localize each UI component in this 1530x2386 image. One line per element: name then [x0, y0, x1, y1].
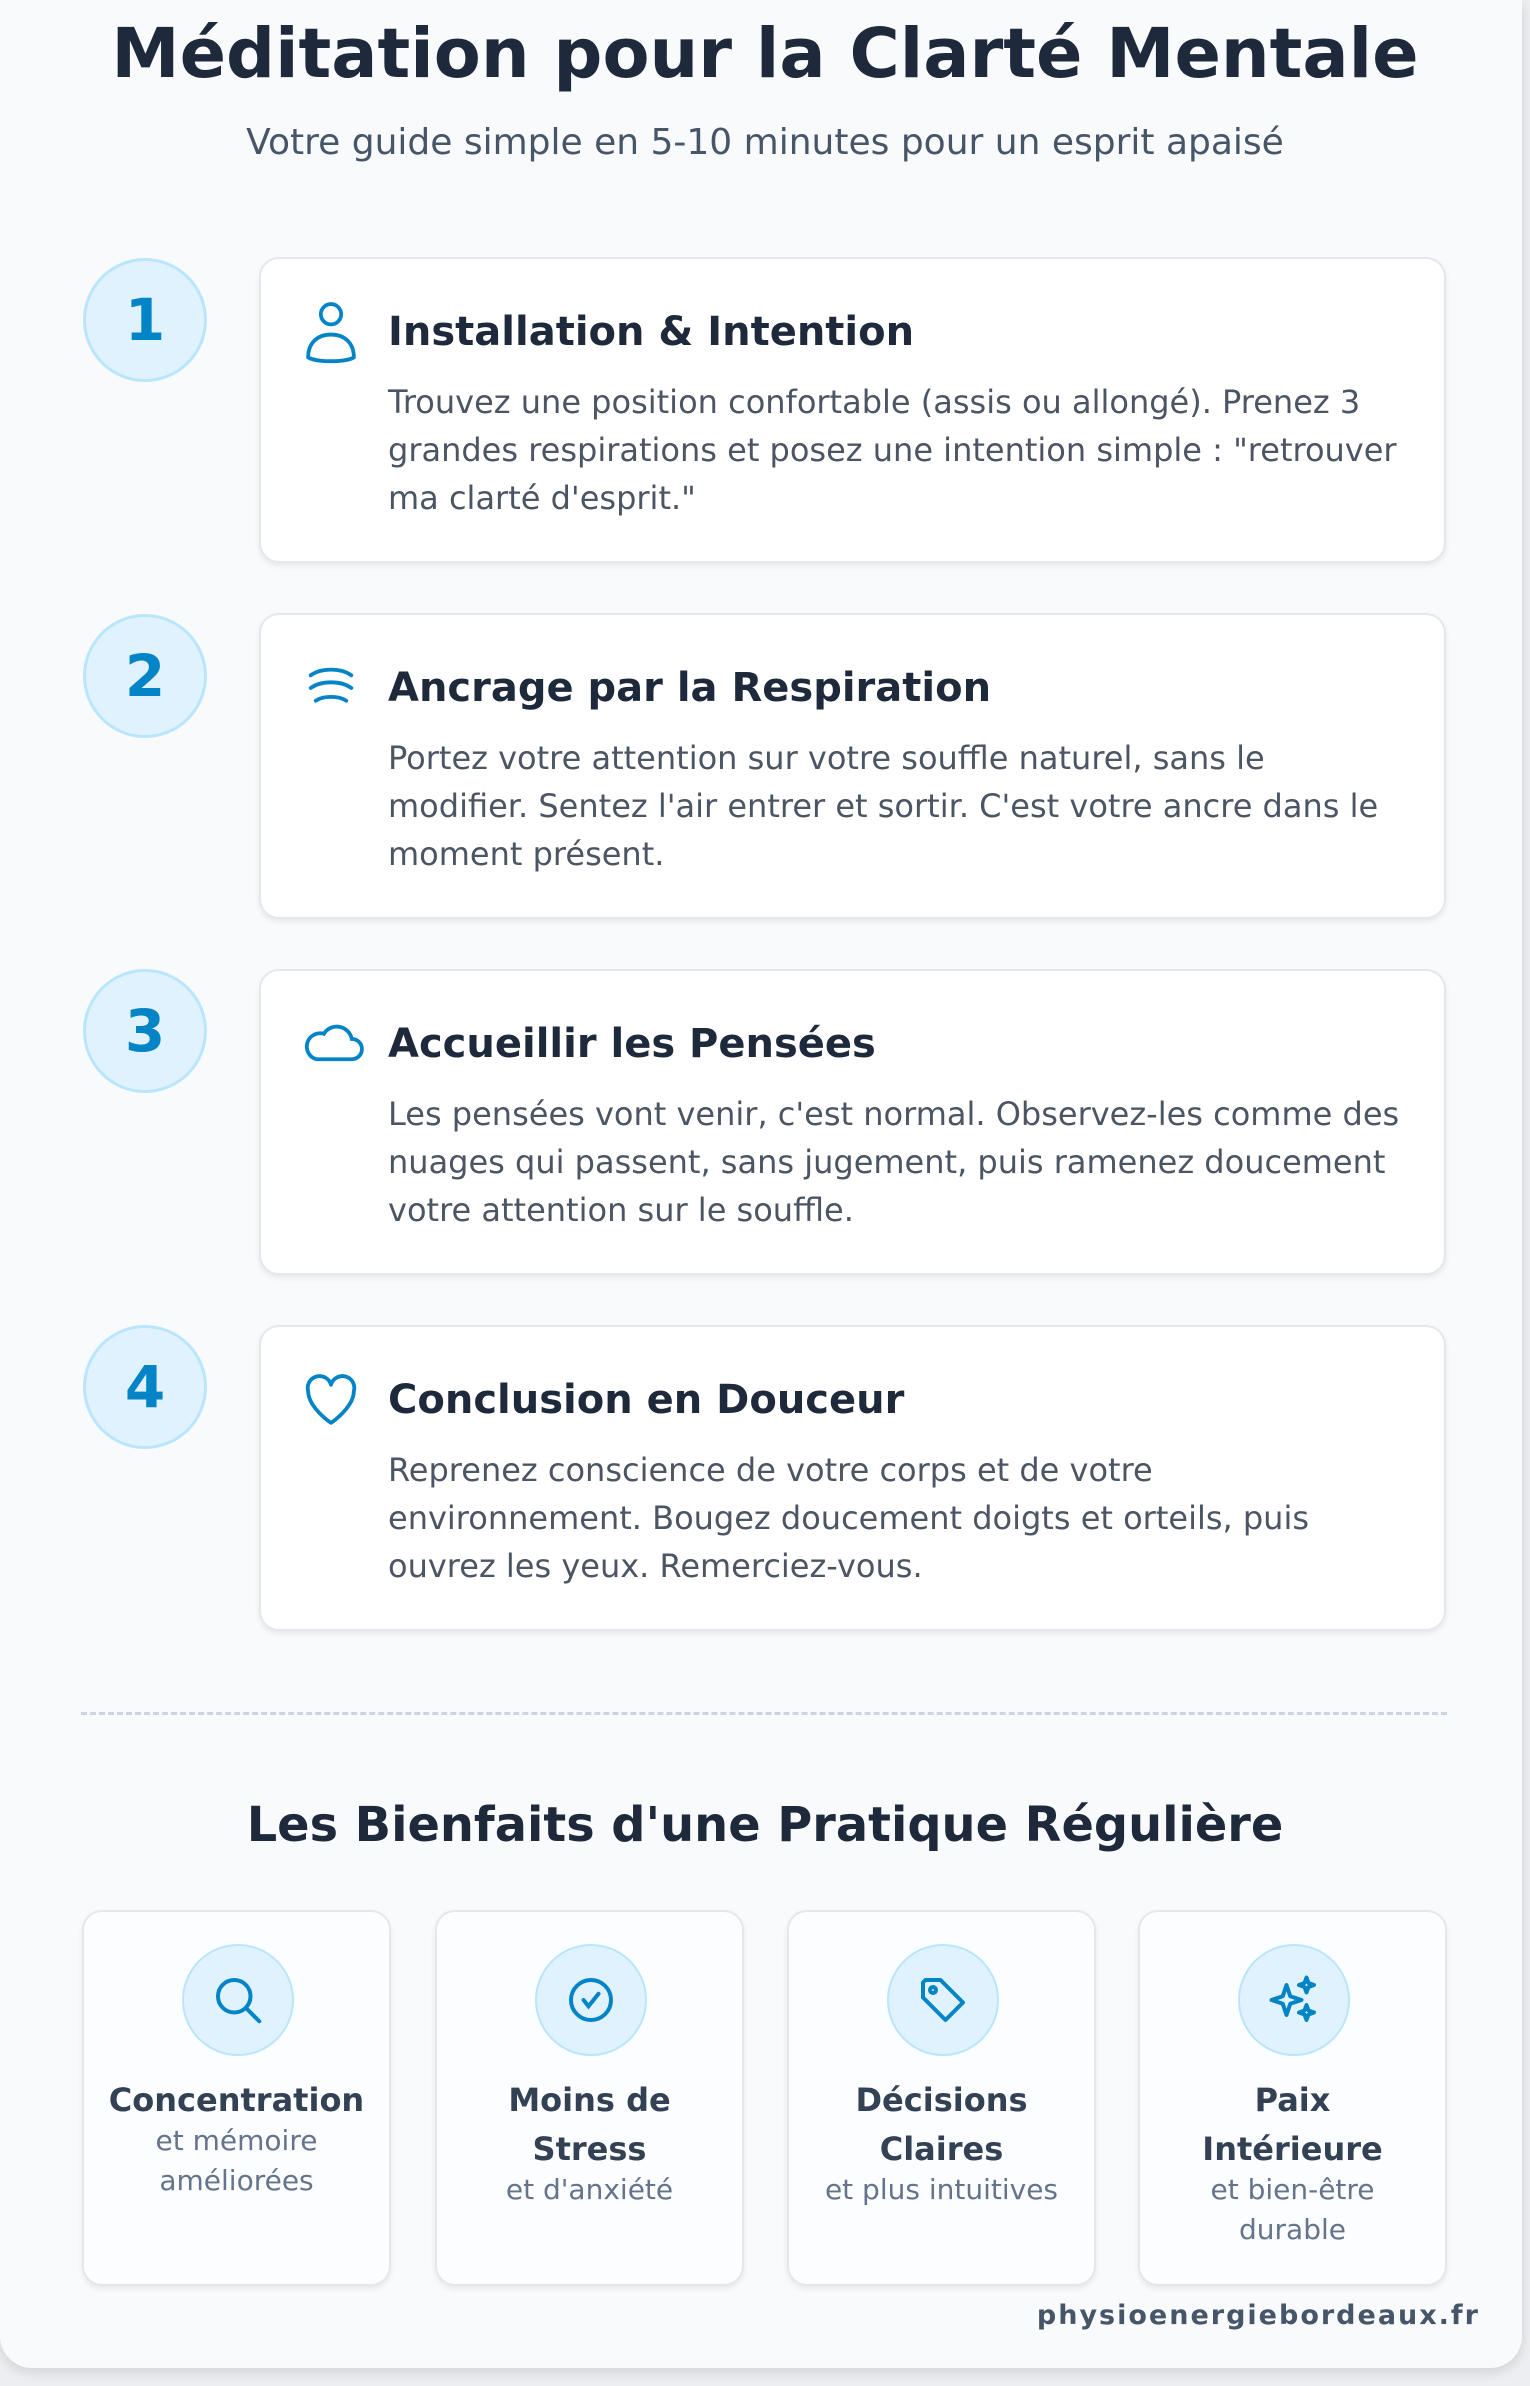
text: Paix: [1255, 2081, 1330, 2119]
text: améliorées: [159, 2164, 314, 2197]
text: Concentration: [109, 2081, 364, 2119]
text: Moins de: [508, 2081, 671, 2119]
text: [109, 2081, 364, 2197]
step number 1: 1: [125, 286, 165, 354]
heading: Conclusion en Douceur: [388, 1377, 904, 1423]
text: Les pensées vont venir, c'est normal. Observez-les comme des nuages qui passent, sans jugement, puis ramenez doucement votre attention sur le souffle.: [388, 1095, 1399, 1229]
heading: Ancrage par la Respiration: [388, 665, 991, 711]
benefit card: stress: [435, 1910, 744, 2286]
text: et bien-être: [1210, 2173, 1375, 2206]
step number 4: 4: [125, 1353, 165, 1421]
text: [825, 2081, 1058, 2206]
panel: step 1: [259, 257, 1446, 563]
text: et d'anxiété: [506, 2173, 673, 2206]
text: et mémoire: [156, 2124, 317, 2157]
panel: step 2: [259, 613, 1446, 919]
icon: person: [306, 302, 356, 364]
panel: step 3: [259, 969, 1446, 1275]
icon: magnifier: [182, 1944, 294, 2056]
benefit card: peace: [1138, 1910, 1447, 2286]
step number 2: 2: [125, 642, 165, 710]
icon: wind: [308, 668, 354, 703]
icon: heart: [306, 1374, 356, 1425]
text: Portez votre attention sur votre souffle naturel, sans le modifier. Sentez l'air entrer et sortir. C'est votre ancre dans le moment présent.: [388, 739, 1378, 873]
icon: check circle: [535, 1944, 647, 2056]
icon: tag: [887, 1944, 999, 2056]
benefit card: concentration: [82, 1910, 391, 2286]
step number 3: 3: [125, 997, 165, 1065]
step number 1: [83, 258, 207, 382]
text: Claires: [880, 2130, 1003, 2168]
footer: physioenergiebordeaux.fr: [1037, 2300, 1480, 2331]
text: durable: [1239, 2213, 1346, 2246]
subtitle: Votre guide simple en 5-10 minutes pour un esprit apaisé: [246, 122, 1284, 163]
heading: Accueillir les Pensées: [388, 1021, 876, 1067]
text: Reprenez conscience de votre corps et de votre environnement. Bougez doucement doigts et orteils, puis ouvrez les yeux. Remerciez-vous.: [388, 1451, 1309, 1585]
text: [1202, 2081, 1383, 2246]
step number 2: [83, 614, 207, 738]
step number 3: [83, 969, 207, 1093]
icon: sparkles: [1238, 1944, 1350, 2056]
step number 4: [83, 1325, 207, 1449]
panel: step 4: [259, 1325, 1446, 1631]
section heading: benefits: Les Bienfaits d'une Pratique Régulière: [247, 1798, 1283, 1853]
text: Intérieure: [1202, 2130, 1383, 2168]
benefit card: decisions: [787, 1910, 1096, 2286]
text: et plus intuitives: [825, 2173, 1058, 2206]
text: Stress: [533, 2130, 646, 2168]
text: [506, 2081, 673, 2206]
heading: Installation & Intention: [388, 309, 914, 355]
title: Méditation pour la Clarté Mentale: [111, 14, 1419, 94]
text: Décisions: [855, 2081, 1028, 2119]
text: Trouvez une position confortable (assis ou allongé). Prenez 3 grandes respirations et posez une intention simple : "retrouver ma clarté d'esprit.": [388, 383, 1397, 517]
icon: cloud: [304, 1024, 364, 1062]
